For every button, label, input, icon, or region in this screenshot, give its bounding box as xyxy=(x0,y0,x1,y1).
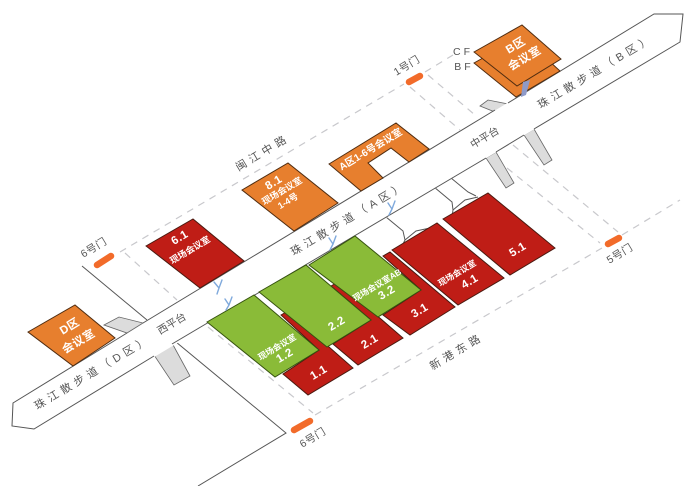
room B zone CF: B区 xyxy=(503,35,528,57)
room 6.1: 现场会议室 xyxy=(168,233,212,266)
bridge to B zone xyxy=(521,80,530,97)
gate labels xyxy=(78,53,635,450)
room 4.1 xyxy=(392,223,504,305)
floor labels xyxy=(453,46,474,73)
room A zone xyxy=(329,123,429,191)
room 8.1 xyxy=(242,163,338,231)
platform labels: 中平台 xyxy=(468,124,502,151)
room 3.1: 3.1 xyxy=(409,301,431,321)
room 8.1: 1-4号 xyxy=(276,191,300,211)
road labels: 珠江散步道（A区） xyxy=(288,178,409,258)
room 1.1 xyxy=(281,311,353,395)
room 8.1: 8.1 xyxy=(263,173,285,193)
room 3.2: 3.2 xyxy=(376,283,398,303)
road labels: 珠江散步道（B区） xyxy=(535,31,656,111)
room 4.1: 现场会议室 xyxy=(436,258,478,288)
gate labels: 6号门 xyxy=(297,425,328,450)
room 8.1: 现场会议室 xyxy=(260,174,304,207)
floor labels: CF xyxy=(453,46,473,58)
room 3.1 xyxy=(383,252,455,335)
room 3.2: 现场会议室AB xyxy=(351,267,403,303)
road labels: 珠江散步道（D区） xyxy=(32,332,153,413)
room B zone BF xyxy=(474,36,560,97)
gate labels: 6号门 xyxy=(78,235,109,260)
gate labels: 5号门 xyxy=(604,241,635,266)
room 1.2: 1.2 xyxy=(274,346,296,366)
room 2.1: 2.1 xyxy=(359,332,381,352)
dashed boundary roads xyxy=(120,55,680,415)
platform stubs xyxy=(104,100,552,385)
room 6.1: 6.1 xyxy=(169,228,191,248)
room 1.1: 1.1 xyxy=(308,363,330,383)
gate labels: 1号门 xyxy=(391,53,422,78)
room 5.1: 5.1 xyxy=(507,240,529,260)
room B zone CF: 会议室 xyxy=(505,43,544,73)
room 4.1: 4.1 xyxy=(459,272,481,292)
room 2.1 xyxy=(331,282,403,365)
platform labels xyxy=(155,124,502,337)
gate markers xyxy=(97,76,619,430)
road labels: 闽江中路 xyxy=(233,131,292,174)
road labels: 新港东路 xyxy=(427,329,486,373)
room B zone CF xyxy=(474,25,561,86)
room 2.2: 2.2 xyxy=(326,314,348,334)
road labels xyxy=(32,31,656,413)
room: D zone xyxy=(28,305,115,366)
room 1.2: 现场会议室 xyxy=(256,332,298,362)
bridge icons xyxy=(214,201,395,310)
room 5.1 xyxy=(443,193,555,275)
room A zone: A区1-6号会议室 xyxy=(336,125,405,173)
room: D zone: 会议室 xyxy=(59,326,98,356)
room 3.2 xyxy=(309,236,421,317)
floor labels: BF xyxy=(454,61,474,73)
room: D zone: D区 xyxy=(57,316,82,338)
room 1.2 xyxy=(207,295,319,377)
room 6.1 xyxy=(146,219,244,288)
platform labels: 西平台 xyxy=(155,310,189,337)
room 2.2 xyxy=(259,265,371,347)
outer site lines xyxy=(82,158,486,486)
